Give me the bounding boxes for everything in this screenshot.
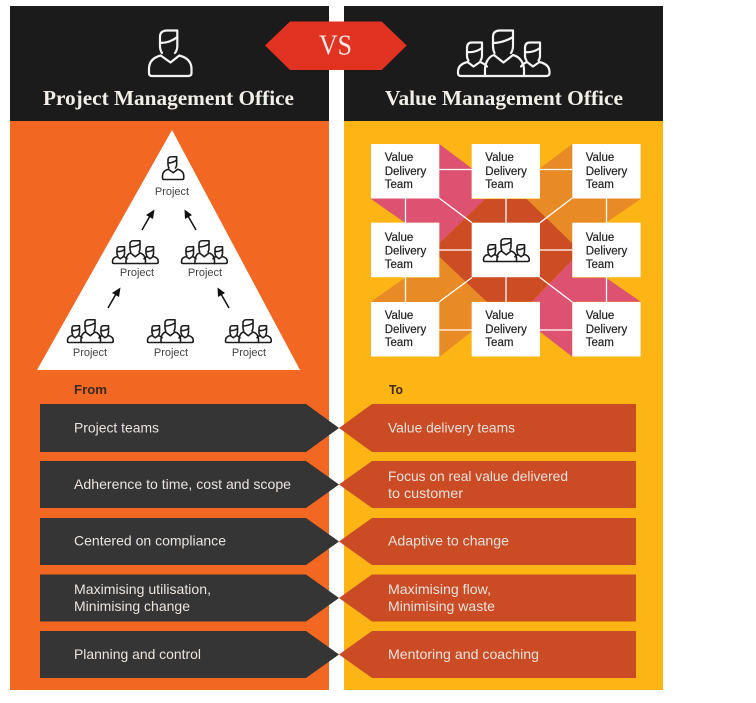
team box middle left: Team [385,259,413,271]
badge: VS: VS [319,30,352,62]
arrow: bottom left to middle [108,288,120,308]
team box middle left [371,223,439,277]
from row: planning: Planning and control [74,646,201,662]
black header band [10,6,329,121]
team box top right [572,144,641,198]
heading: value management office: Value Management Office [385,86,623,110]
label: bottom middle project: Project [154,347,188,359]
panel: value management office [344,6,663,690]
team box bottom right: Team [586,337,614,349]
arrow: bottom right to middle [218,288,229,308]
from row: compliance: Centered on compliance [74,532,226,548]
white connector lines [406,170,606,330]
team box bottom middle: Team [485,337,513,349]
team box top left [371,144,439,198]
team box middle right: Delivery [586,246,627,258]
team box middle right: Value [586,232,614,244]
label: to: To [389,382,403,397]
from row: adherence: Adherence to time, cost and scope [74,476,291,492]
team box bottom left [371,302,439,356]
black header band [344,6,663,121]
team box bottom left: Team [385,337,413,349]
badge: VS [265,22,407,70]
to row: adaptive [339,518,636,565]
from row: maximising utilisation: Minimising change [74,598,190,614]
team box top right: Team [586,179,614,191]
white triangle [37,130,300,370]
to row: maximising flow [339,574,636,622]
team box middle right: Team [586,259,614,271]
from row: maximising utilisation [40,574,339,622]
to row: focus on value: to customer [388,485,463,501]
team box middle right [572,223,641,277]
from row: planning [40,631,339,678]
label: middle left project: Project [120,267,154,279]
team box bottom right [572,302,641,356]
network diagram [371,144,641,357]
from row: project teams [40,404,339,452]
team box top middle: Team [485,179,513,191]
centre box with team icon [472,223,540,277]
icon: management team [458,30,550,76]
team box bottom left: Delivery [385,324,426,336]
from row: maximising utilisation: Maximising utilisation, [74,581,211,597]
panel: project management office [10,6,329,690]
from row: adherence [40,461,339,508]
heading: project management office: Project Management Office [43,86,294,110]
team box top middle: Delivery [485,166,527,178]
to row: adaptive: Adaptive to change [388,532,509,548]
to row: maximising flow: Minimising waste [388,598,495,614]
team box bottom middle: Delivery [485,324,527,336]
team box top middle: Value [485,152,514,164]
team box bottom middle [472,302,540,356]
to row: value delivery teams: Value delivery teams [388,420,515,436]
icon: single manager [149,30,192,76]
team box top right: Delivery [586,166,627,178]
team box bottom left: Value [385,310,413,322]
arrow: middle right to top [184,210,196,230]
pink band lower right [532,260,641,357]
from row: compliance [40,518,339,565]
icon: bottom left team [68,320,113,342]
to row: value delivery teams [339,404,636,452]
pyramid diagram [37,130,300,370]
team box bottom middle: Value [485,310,514,322]
orange band upper right [527,144,641,243]
team box bottom right: Delivery [586,324,627,336]
orange panel background [10,121,329,690]
to row: mentoring [339,631,636,678]
icon: middle right team [182,241,227,264]
arrow: middle left to top [142,210,154,230]
label: top project: Project [155,186,189,198]
icon: top project person [162,157,184,180]
to row: mentoring: Mentoring and coaching [388,646,539,662]
label: middle right project: Project [188,267,222,279]
to row: focus on value [339,461,636,508]
pink band upper left [371,144,485,243]
team box middle left: Value [385,232,413,244]
icon: bottom middle team [148,320,193,342]
to row: maximising flow: Maximising flow, [388,581,491,597]
team box top right: Value [586,152,614,164]
team box middle left: Delivery [385,246,426,258]
to row: focus on value: Focus on real value delivered [388,468,568,484]
dark orange centre [439,199,572,302]
yellow panel background [344,121,663,690]
team box bottom right: Value [586,310,614,322]
team box top left: Value [385,152,413,164]
label: bottom right project: Project [232,347,266,359]
label: from: From [74,382,107,397]
from row: project teams: Project teams [74,420,159,436]
orange band lower left [371,257,487,357]
icon: bottom right team [226,320,271,342]
label: bottom left project: Project [73,347,107,359]
team box top left: Team [385,179,413,191]
team box top middle [472,144,540,198]
icon: middle left team [112,241,158,264]
team box top left: Delivery [385,166,426,178]
